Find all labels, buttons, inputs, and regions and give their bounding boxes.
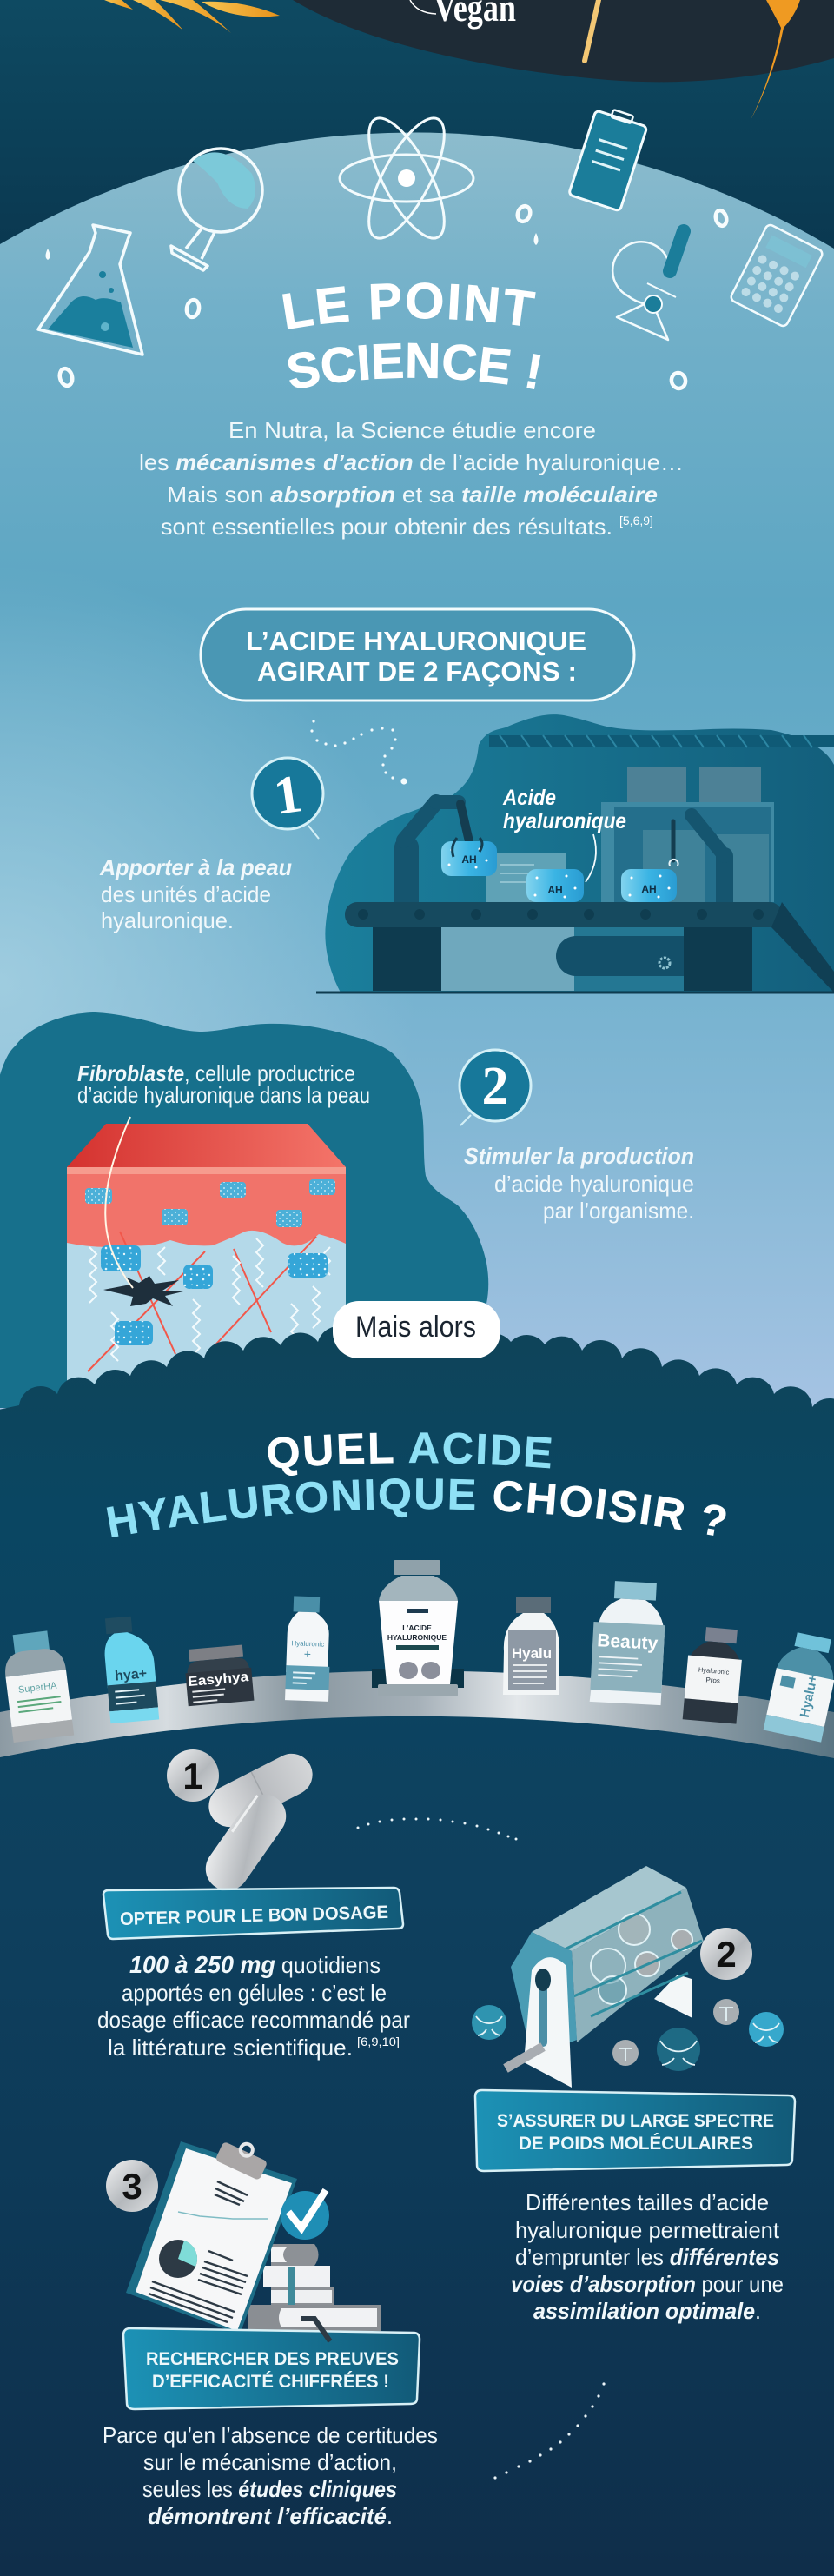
text block: stimuler la production bbox=[464, 1143, 694, 1224]
text block: tailles bbox=[511, 2189, 784, 2324]
lower belt bbox=[556, 936, 730, 976]
right stand bbox=[654, 1975, 692, 2018]
box: large spectre: DE POIDS MOLÉCULAIRES bbox=[519, 2134, 753, 2154]
pill: mais alors bbox=[333, 1301, 500, 1358]
AH block held by arm bbox=[441, 838, 497, 876]
badge: number 1: 1 bbox=[270, 764, 305, 827]
report text lines bbox=[149, 2251, 248, 2322]
bottle: hya+: hya+ bbox=[115, 1666, 148, 1684]
text block: dosage: [6,9,10] bbox=[357, 2035, 400, 2048]
text block: dosage: apportés en gélules : c’est le bbox=[122, 1980, 387, 2006]
bottle: hyalu bbox=[503, 1597, 559, 1695]
pill: l'acide hyaluronique agirait de 2 facons: AGIRAIT DE 2 FAÇONS : bbox=[257, 656, 577, 687]
illustration: clipboard report bbox=[126, 2134, 297, 2334]
bottle: l'acide hyaluronique: HYALURONIQUE bbox=[387, 1633, 447, 1642]
background boxes bbox=[441, 767, 774, 991]
text block: intro bbox=[139, 417, 684, 540]
AH block on belt 2 bbox=[621, 869, 677, 902]
badge: number 1 bbox=[252, 758, 323, 839]
badge: step 3 bbox=[106, 2160, 158, 2212]
icon: vegan logo bbox=[410, 0, 516, 30]
pill: l'acide hyaluronique agirait de 2 facons: L’ACIDE HYALURONIQUE bbox=[246, 626, 586, 656]
bottle: hyalu+: Hyalu+ bbox=[798, 1674, 821, 1719]
text block: stimuler la production: Stimuler la production bbox=[464, 1143, 694, 1169]
title: le point science: LE POINT bbox=[282, 282, 536, 329]
gear icon bbox=[659, 958, 670, 968]
bottle: hyaluronic pros: Hyaluronic bbox=[698, 1666, 730, 1676]
illustration: tumbler machine bbox=[506, 1866, 704, 2088]
pie chart bbox=[159, 2240, 197, 2278]
heading: quel acide hyaluronique choisir: HYALURONIQUE CHOISIR ? bbox=[106, 1478, 726, 1537]
icon: conical flask bbox=[38, 225, 142, 355]
icon: bookmark ribbon bbox=[301, 2319, 330, 2341]
text block: stimuler la production: d’acide hyaluronique bbox=[494, 1171, 694, 1197]
heading: quel acide hyaluronique choisir bbox=[106, 1432, 726, 1537]
icon: check badge bbox=[281, 2190, 329, 2240]
badge: step 2: 2 bbox=[716, 1934, 737, 1975]
text block: intro: Mais son absorption et sa taille moléculaire bbox=[167, 481, 658, 508]
dark section with scalloped edge bbox=[0, 1325, 834, 2576]
text block: apporter a la peau: hyaluronique. bbox=[101, 907, 234, 933]
skin epidermis bbox=[67, 1167, 346, 1247]
icon: floating rings and drops bbox=[45, 204, 728, 390]
bottle: l'acide hyaluronique: L’ACIDE bbox=[402, 1623, 432, 1632]
box: opter pour le bon dosage: OPTER POUR LE BON DOSAGE bbox=[120, 1902, 388, 1929]
conveyor belt bbox=[345, 902, 834, 993]
text block: etudes cliniques: seules les études cliniques bbox=[142, 2476, 397, 2502]
badge: step 3: 3 bbox=[122, 2166, 142, 2207]
badge: step 2 bbox=[700, 1928, 752, 1980]
background: dark top band bbox=[0, 0, 834, 278]
AH block on belt bbox=[526, 869, 584, 902]
icon: wheat leaves bbox=[104, 0, 280, 33]
drum front face bbox=[572, 1888, 704, 2042]
bottle: easyhya bbox=[183, 1644, 254, 1706]
clip bbox=[215, 2134, 271, 2181]
ground line bbox=[316, 991, 834, 994]
illustration: books bbox=[248, 2244, 381, 2331]
bottle: hyaluronic + bbox=[285, 1596, 332, 1702]
small hyaluronic blocks bbox=[85, 1179, 335, 1227]
left end bbox=[511, 1932, 577, 2057]
heading: quel acide hyaluronique choisir: QUEL ACIDE bbox=[268, 1432, 552, 1476]
label: acide hyaluronique: Acide bbox=[502, 786, 556, 810]
elastin squiggles bbox=[89, 1238, 330, 1361]
text block: dosage bbox=[97, 1951, 410, 2061]
icon: stick bbox=[585, 0, 599, 61]
dotted arrow: step 1 to step 2 bbox=[356, 1818, 518, 1841]
text block: fibroblaste: d’acide hyaluronique dans la peau bbox=[77, 1082, 370, 1108]
callout line bbox=[105, 1117, 133, 1288]
AH block on belt 2: AH bbox=[641, 883, 657, 895]
badge: number 2 bbox=[460, 1050, 531, 1125]
text block: tailles: assimilation optimale. bbox=[533, 2298, 761, 2324]
text block: fibroblaste bbox=[77, 1060, 370, 1108]
bottle: hyaluronic pros: Pros bbox=[705, 1676, 720, 1685]
icon: calculator bbox=[730, 223, 824, 328]
text block: etudes cliniques: Parce qu’en l’absence de certitudes bbox=[103, 2422, 438, 2448]
box: rechercher des preuves bbox=[123, 2328, 420, 2409]
bottle: beauty bbox=[590, 1580, 667, 1705]
pill: l'acide hyaluronique agirait de 2 facons bbox=[201, 609, 634, 700]
background: light dome section bbox=[0, 133, 834, 1477]
machine legs bbox=[373, 927, 752, 991]
title: le point science bbox=[282, 282, 540, 389]
bottle: beauty: Beauty bbox=[597, 1630, 659, 1654]
illustration: factory conveyor bbox=[316, 714, 834, 993]
icon: clipboard bbox=[568, 104, 649, 211]
bottle: hyalu: Hyalu bbox=[512, 1645, 552, 1662]
report title bbox=[215, 2181, 248, 2205]
rail bbox=[489, 735, 834, 747]
AH block on belt: AH bbox=[547, 884, 563, 896]
bottle: hyalu+ bbox=[764, 1630, 834, 1743]
left stand bbox=[524, 1957, 572, 2088]
bottle: l'acide hyaluronique bbox=[372, 1560, 464, 1696]
collagen fibres bbox=[88, 1232, 316, 1371]
bottle: superHA: SuperHA bbox=[17, 1680, 58, 1696]
text block: apporter a la peau bbox=[99, 854, 292, 933]
molecules around machine bbox=[472, 1999, 784, 2071]
dotted arrow: end bbox=[493, 2382, 606, 2480]
title: le point science: SCIENCE ! bbox=[288, 342, 540, 389]
large hyaluronic blocks bbox=[101, 1245, 328, 1345]
text block: intro: les mécanismes d’action de l’acide hyaluronique… bbox=[139, 449, 684, 475]
bottle: hyaluronic +: Hyaluronic bbox=[291, 1639, 324, 1649]
box: opter pour le bon dosage bbox=[103, 1888, 403, 1939]
badge: number 2: 2 bbox=[481, 1057, 509, 1116]
text block: apporter a la peau: Apporter à la peau bbox=[99, 854, 292, 880]
text block: intro: En Nutra, la Science étudie encore bbox=[228, 417, 596, 443]
molecules in drum bbox=[591, 1914, 692, 2004]
box: rechercher des preuves: RECHERCHER DES PREUVES bbox=[146, 2349, 399, 2369]
skin dermis bbox=[67, 1167, 346, 1402]
bottle: easyhya: Easyhya bbox=[188, 1670, 249, 1690]
box: large spectre: S’ASSURER DU LARGE SPECTRE bbox=[497, 2111, 774, 2131]
text block: dosage: dosage efficace recommandé par bbox=[97, 2007, 410, 2033]
left robot arm bbox=[404, 802, 469, 902]
text block: intro: [5,6,9] bbox=[619, 514, 653, 528]
drum ribs bbox=[565, 1892, 702, 2016]
icon: microscope bbox=[612, 231, 684, 340]
fibroblast cell bbox=[103, 1276, 183, 1306]
bottle: hyaluronic +: + bbox=[304, 1647, 311, 1661]
dotted arrow: pill to factory bbox=[310, 720, 407, 785]
label: acide hyaluronique bbox=[502, 786, 626, 882]
label: acide hyaluronique: hyaluronique bbox=[503, 809, 626, 833]
text block: apporter a la peau: des unités d’acide bbox=[101, 881, 271, 907]
dark top blob with previous section remnants bbox=[293, 0, 834, 120]
text block: tailles: d’emprunter les différentes bbox=[515, 2244, 779, 2270]
text block: dosage: la littérature scientifique. bbox=[108, 2035, 353, 2061]
bottle: superHA bbox=[1, 1629, 74, 1743]
text block: intro: sont essentielles pour obtenir des résultats. bbox=[161, 514, 612, 540]
badge: step 1: 1 bbox=[182, 1756, 203, 1796]
box: rechercher des preuves: D’EFFICACITÉ CHIFFRÉES ! bbox=[152, 2372, 389, 2392]
skin top face bbox=[67, 1124, 346, 1167]
text block: stimuler la production: par l’organisme. bbox=[543, 1198, 694, 1224]
pill: mais alors: Mais alors bbox=[355, 1311, 476, 1344]
AH block held by arm: AH bbox=[461, 853, 477, 866]
text block: etudes cliniques: sur le mécanisme d’action, bbox=[143, 2449, 397, 2475]
right robot arm bbox=[670, 815, 725, 902]
text block: etudes cliniques: démontrent l’efficacité. bbox=[148, 2503, 393, 2529]
text block: dosage: 100 à 250 mg quotidiens bbox=[129, 1951, 381, 1978]
icon: round flask bbox=[171, 149, 262, 270]
crank handle bbox=[506, 2047, 543, 2068]
bottle: hya+ bbox=[102, 1615, 159, 1723]
bottle: hyaluronic pros bbox=[683, 1626, 745, 1724]
illustration: capsules bbox=[197, 1747, 320, 1899]
text block: tailles: Différentes tailles d’acide bbox=[526, 2189, 769, 2215]
icon: atom bbox=[340, 108, 473, 249]
report line bbox=[178, 2212, 268, 2219]
box: large spectre bbox=[475, 2090, 795, 2171]
text block: fibroblaste: Fibroblaste, cellule productrice bbox=[77, 1060, 355, 1086]
text block: etudes cliniques bbox=[103, 2422, 438, 2529]
text block: tailles: voies d’absorption pour une bbox=[511, 2271, 784, 2297]
drum top face bbox=[532, 1866, 686, 1951]
icon: orange drop bbox=[751, 0, 800, 120]
text block: tailles: hyaluronique permettraient bbox=[515, 2217, 780, 2243]
crank slot bbox=[539, 1982, 547, 2042]
badge: step 1 bbox=[167, 1749, 219, 1802]
shelf bbox=[0, 1670, 834, 1758]
illustration panel: skin and fibroblast bbox=[0, 1012, 488, 1408]
